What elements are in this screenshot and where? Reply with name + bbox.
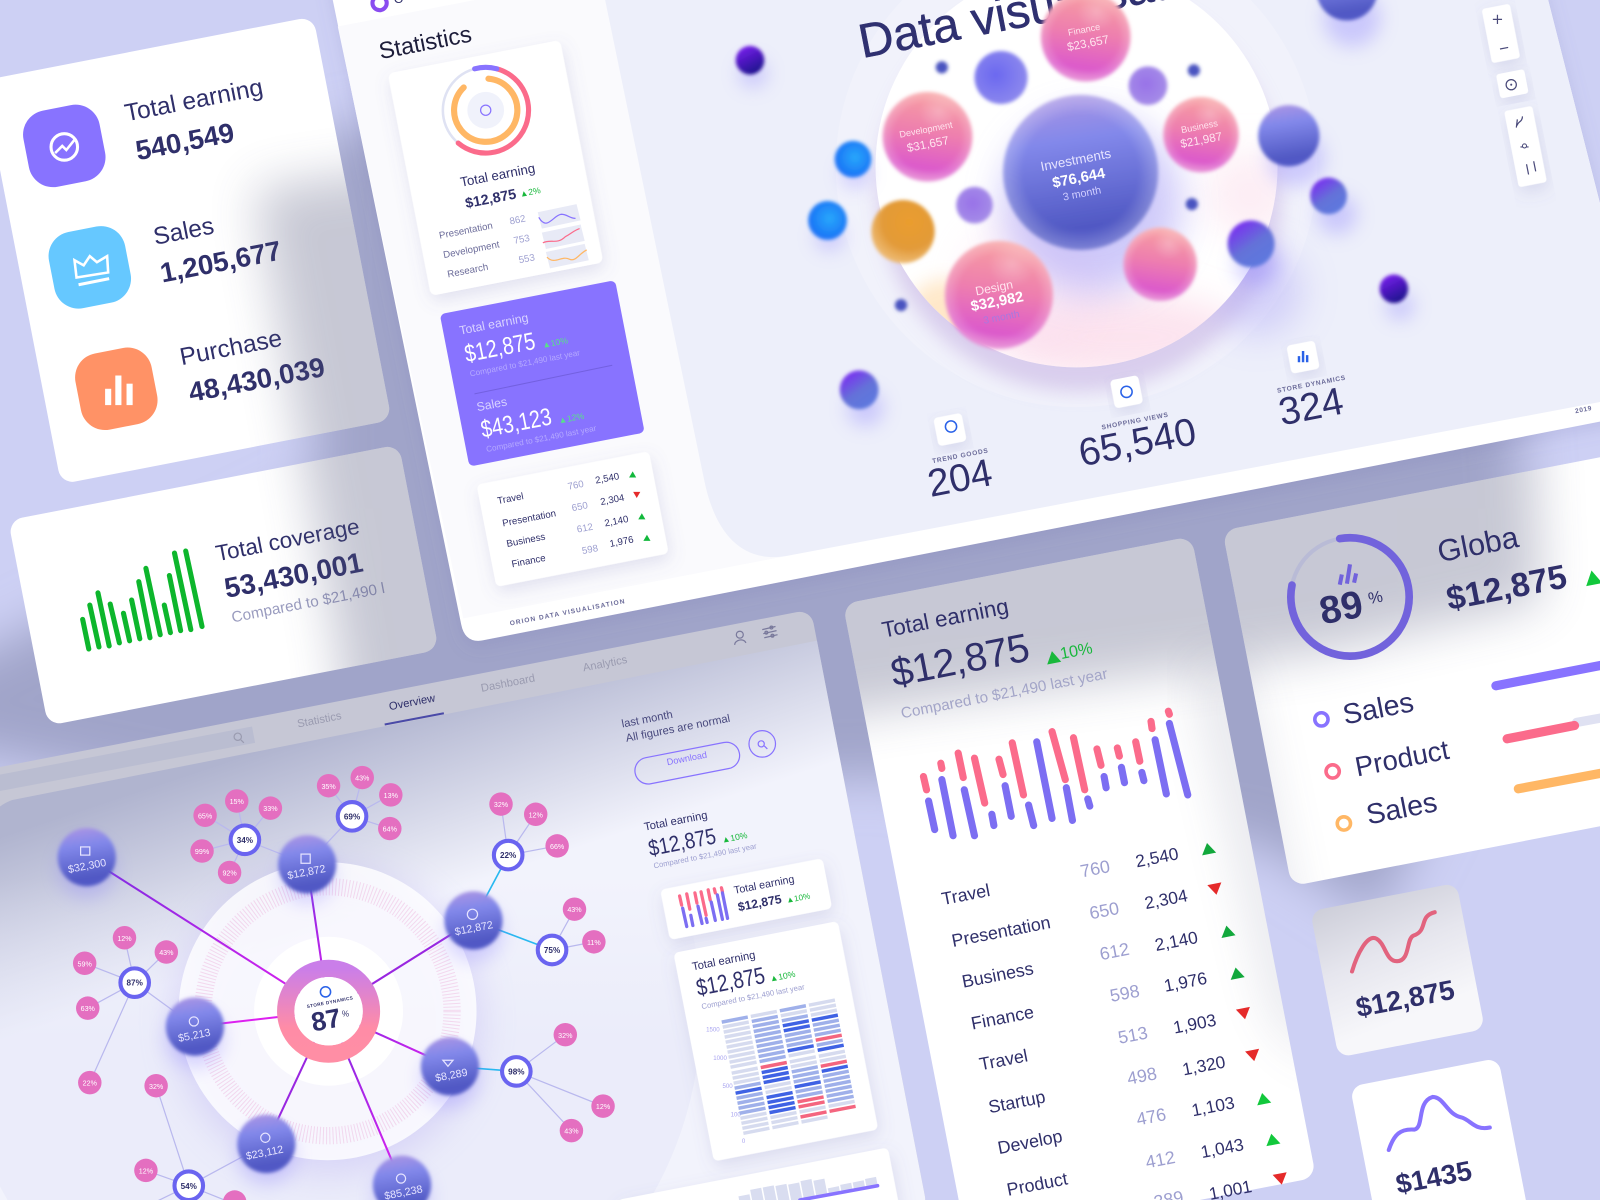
nodes: value spheres: $8,289 [434, 1067, 469, 1085]
card: sparkline total: $1435 [1393, 1155, 1474, 1200]
table: dark values: 2,140 [1153, 927, 1199, 955]
card: heatmap: Compared to $21,490 last year [701, 982, 806, 1011]
text: earning header: 10% [1059, 639, 1094, 663]
leaf nodes: 13% [384, 792, 399, 800]
center card content [880, 594, 1289, 1200]
table: grey values: 612 [1098, 939, 1131, 964]
table: categories: Presentation [950, 912, 1052, 951]
leaf nodes: 32% [558, 1032, 573, 1040]
soft shadow across cards [255, 0, 1541, 1071]
chart: bubble visualisation [736, 0, 1414, 427]
leaf nodes: 12% [596, 1103, 611, 1111]
text: total earning: Total earning [123, 74, 265, 127]
nodes: value spheres [58, 828, 503, 1200]
nodes: value spheres: $12,872 [286, 863, 327, 882]
button: download [633, 740, 742, 786]
card: heatmap: ▲10% [769, 969, 797, 984]
ring nodes: 22% [500, 851, 517, 860]
card: purple earning summary: Total earning [458, 310, 530, 338]
table: dark values: 2,540 [1134, 843, 1180, 871]
bubble: unlabelled pink [1123, 228, 1197, 301]
cast shadow on background [0, 0, 1531, 918]
leaf nodes: 22% [83, 1080, 98, 1088]
icon: settings [762, 626, 778, 638]
radial backdrop [174, 862, 481, 1173]
card: small table: 650 [571, 500, 589, 514]
leaf nodes: 33% [263, 805, 278, 813]
nav tab: overview active: Overview [388, 692, 437, 713]
card: purple earning summary: Sales [475, 395, 508, 414]
table: grey values [1079, 856, 1185, 1200]
card: donut total earning: ▲2% [519, 185, 542, 199]
card: purple earning summary: $12,875 [462, 328, 538, 368]
progress bars [1496, 659, 1600, 789]
table: grey values: 476 [1135, 1104, 1168, 1129]
disc tints [907, 114, 1293, 380]
bubble: business [1163, 97, 1239, 172]
bubble: design [945, 241, 1053, 349]
table: dark values: 1,320 [1181, 1052, 1227, 1079]
card: sparkline value [1310, 883, 1485, 1057]
text: global value: $12,875 [1443, 559, 1570, 618]
table: dark values: 1,043 [1199, 1134, 1245, 1162]
panel: earnings summary [0, 16, 392, 484]
ring nodes: 54% [181, 1182, 198, 1191]
text: coverage title: Total coverage [214, 514, 362, 566]
text: status note: last month [621, 709, 674, 730]
leaf nodes: 11% [587, 939, 601, 947]
heatmap axis: 1000 [713, 1055, 727, 1062]
ring nodes: 69% [344, 812, 361, 821]
table: grey values: 650 [1088, 898, 1121, 923]
leaf nodes: 99% [195, 848, 210, 856]
text: sales value: 1,205,677 [157, 235, 284, 289]
footer: year: 2019 [1575, 405, 1593, 415]
leaf nodes: 43% [567, 906, 582, 914]
leaf nodes: 43% [355, 775, 370, 783]
donut chart [433, 58, 538, 163]
stat: store dynamics [1275, 340, 1347, 434]
stat: trend goods [924, 413, 996, 506]
panel: main data visualisation board [329, 0, 1600, 641]
card: purple earning summary: ▲12% [558, 411, 585, 425]
ring nodes: 87% [127, 979, 144, 988]
text: earning summary: Total earning [643, 810, 709, 834]
card: purple earning summary: ▲10% [541, 335, 569, 350]
text: earning summary [643, 810, 758, 870]
mini table values [509, 214, 536, 266]
nav tab: analytics: Analytics [582, 654, 629, 674]
network links [87, 855, 552, 1185]
icon: crown badge [44, 222, 135, 313]
button: download: Download [666, 750, 708, 767]
card: donut total earning: Total earning [459, 160, 536, 190]
bubble: business: Business [1180, 118, 1219, 135]
stat: shopping views [1075, 375, 1200, 475]
nodes: value spheres: $23,112 [245, 1144, 285, 1163]
text: coverage value: 53,430,001 [222, 547, 365, 604]
text: sales: Sales [151, 213, 216, 251]
card: mini bars: ▲10% [785, 892, 811, 905]
nav tab: statistics: Statistics [296, 710, 343, 730]
button: round icon [749, 731, 776, 757]
leaf nodes: 64% [383, 826, 398, 834]
table: dark values: 1,976 [1162, 968, 1209, 996]
center gauge: store dynamics: STORE DYNAMICS [306, 995, 354, 1009]
stat: shopping views: 65,540 [1075, 410, 1200, 475]
bubble: development: $31,657 [906, 134, 950, 155]
card: heatmap: Total earning [691, 949, 756, 973]
card: heatmap [673, 921, 878, 1161]
center gauge: store dynamics: 87 [309, 1002, 343, 1038]
nav tab: overview active [385, 692, 444, 724]
text: earning header [880, 594, 1109, 722]
table: categories: Travel [940, 880, 992, 909]
card: small table: Presentation [502, 508, 557, 529]
heatmap axis: 100 [731, 1111, 741, 1118]
card: small table: 760 [567, 479, 585, 493]
panel: overview dashboard [0, 609, 1020, 1200]
outer purple glow [1212, 246, 1302, 336]
stat: trend goods: 204 [924, 451, 996, 506]
card: small table [477, 451, 669, 587]
icon: user [735, 631, 746, 645]
bubble: business: $21,987 [1179, 130, 1223, 151]
text: global heading: Globa [1435, 520, 1522, 569]
text: purchase: Purchase [178, 325, 284, 371]
sidebar background [338, 0, 786, 618]
card: small table: 2,304 [599, 493, 626, 508]
global card content [1281, 520, 1600, 831]
nodes: value spheres: $12,872 [454, 919, 494, 938]
node glyphs [81, 847, 478, 1183]
table: categories: Startup [987, 1087, 1047, 1117]
stat: store dynamics: STORE DYNAMICS [1277, 375, 1347, 395]
card: small table: 612 [576, 522, 594, 536]
leaf nodes: 32% [149, 1083, 164, 1091]
card: mini bars [660, 858, 832, 940]
legend: sales second: Sales [1364, 786, 1440, 831]
leaf nodes: 63% [81, 1005, 96, 1013]
bubble: design: 3 month [982, 309, 1021, 327]
bubble glows [739, 0, 1414, 427]
leaf nodes: 15% [230, 798, 245, 806]
bar chart: coverage [83, 551, 202, 649]
card: small table: 1,976 [609, 534, 635, 550]
heatmap axis: 0 [742, 1138, 746, 1145]
card: donut total earning: $12,875 [464, 187, 518, 212]
chart: network diagram [58, 766, 615, 1200]
text: earning summary: ▲10% [721, 830, 749, 845]
card: sparkline value: $12,875 [1353, 974, 1457, 1023]
mini table values: 553 [518, 252, 536, 266]
bubble: investments: $76,644 [1051, 166, 1107, 192]
text: earning summary: Compared to $21,490 last year [653, 841, 758, 870]
sparklines [538, 204, 589, 268]
ring nodes: 75% [544, 946, 561, 955]
table: categories: Product [1005, 1168, 1069, 1200]
central disc [876, 0, 1278, 367]
heatmap axis: 1500 [706, 1027, 720, 1034]
leaf nodes: 12% [139, 1167, 154, 1175]
card: bottom area chart [617, 1147, 899, 1200]
leaf nodes: 92% [222, 870, 237, 878]
disc shadow [871, 92, 1288, 398]
leaf nodes: 12% [117, 935, 132, 943]
table: trend arrows [1200, 842, 1289, 1186]
bubble: development: Development [898, 120, 954, 140]
table: grey values: 498 [1126, 1063, 1159, 1089]
legend: sales: Sales [1340, 686, 1416, 731]
card: small table: 2,140 [604, 514, 630, 529]
card: sparkline total [1350, 1058, 1529, 1200]
panel: total coverage [8, 444, 439, 726]
leaf nodes: 43% [159, 949, 174, 957]
text: total earning value: 540,549 [133, 117, 237, 166]
leaf nodes: 43% [564, 1128, 579, 1136]
card: purple earning summary: Compared to $21,490 last year [469, 348, 581, 378]
icon: bars badge [71, 343, 162, 434]
card: small table: Business [506, 532, 546, 550]
gauge: 89 percent [1281, 528, 1419, 666]
card: mini bars: Total earning [733, 873, 795, 897]
table: dark values [1134, 843, 1254, 1200]
text: status note: All figures are normal [625, 713, 731, 745]
bubble: investments: 3 month [1062, 184, 1102, 204]
ring nodes: 98% [508, 1067, 525, 1076]
card: small table: Finance [511, 553, 547, 570]
card: purple earning summary: Compared to $21,490 last year [485, 424, 597, 454]
stat: trend goods: TREND GOODS [932, 447, 989, 465]
leaf nodes [73, 766, 615, 1200]
text: earning header: Compared to $21,490 last year [900, 666, 1109, 722]
leaf nodes: 59% [78, 960, 92, 968]
legend: product: Product [1352, 734, 1452, 782]
table: grey values: 412 [1144, 1147, 1177, 1172]
content area [604, 0, 1600, 557]
table: grey values: 598 [1108, 981, 1141, 1006]
mini table: Development [442, 239, 501, 261]
table: categories: Business [960, 958, 1035, 992]
mini table values: 753 [513, 233, 531, 247]
leaf nodes: 12% [529, 811, 544, 819]
bubble: investments [1003, 95, 1158, 250]
leaf nodes: 32% [494, 801, 509, 809]
text: purchase value: 48,430,039 [186, 351, 327, 408]
table: categories [940, 880, 1069, 1200]
text: earning summary: $12,875 [646, 823, 718, 861]
leaf nodes: 65% [198, 812, 213, 820]
text: earning header: Total earning [880, 594, 1011, 643]
card: purple earning summary [440, 280, 645, 467]
mini table [438, 221, 501, 280]
leaf links [85, 778, 603, 1200]
gauge: 89 percent: 89 [1316, 583, 1366, 633]
card: mini bars: $12,875 [737, 892, 783, 914]
icon: search [234, 733, 244, 743]
text: earning header: $12,875 [887, 626, 1033, 696]
table: categories: Develop [996, 1126, 1064, 1158]
nodes: value spheres: $5,213 [177, 1027, 212, 1045]
card: small table: 598 [581, 543, 599, 557]
center gauge: store dynamics [286, 968, 371, 1054]
nav tab: dashboard: Dashboard [480, 673, 536, 695]
stat: store dynamics: 324 [1275, 380, 1347, 434]
table: categories: Finance [969, 1002, 1036, 1034]
bubble: design: $32,982 [969, 289, 1025, 315]
table: dark values: 2,304 [1143, 885, 1190, 913]
gauge: 89 percent: % [1367, 588, 1384, 608]
card: donut total earning [388, 40, 603, 296]
bubble: finance: $23,657 [1066, 33, 1110, 54]
center gauge: store dynamics: % [342, 1009, 349, 1018]
leaf nodes: 66% [550, 843, 565, 851]
mini table values: 862 [509, 214, 527, 227]
mini table: Presentation [438, 221, 494, 242]
heatmap axis: 500 [722, 1083, 733, 1090]
card: heatmap: $12,875 [694, 962, 767, 1001]
bubble: design: Design [974, 277, 1014, 298]
card: small table: 2,540 [594, 471, 621, 487]
text: coverage comparison: Compared to $21,490 l [230, 580, 386, 626]
heatmap axis [706, 1027, 746, 1145]
bubble: finance: Finance [1067, 22, 1101, 38]
toolbar: map controls [1482, 4, 1547, 187]
bubble: development [883, 92, 972, 182]
stat: shopping views: SHOPPING VIEWS [1101, 412, 1169, 432]
bar chart: paired bars [923, 711, 1188, 836]
bubble: investments: Investments [1039, 146, 1113, 174]
ring nodes [120, 802, 566, 1200]
card: small table: Travel [496, 491, 525, 507]
bubble: finance [1041, 0, 1131, 82]
heading: statistics: Statistics [377, 21, 474, 64]
leaf nodes: 35% [321, 783, 336, 791]
icon: green up arrow [1583, 569, 1600, 586]
table: categories: Travel [978, 1045, 1029, 1074]
bubbles: unlabelled [736, 0, 1408, 409]
heatmap grid [721, 998, 857, 1135]
panel: global gauge card [1222, 443, 1600, 886]
table: dark values: 1,903 [1171, 1010, 1218, 1038]
outer halo [836, 0, 1317, 407]
mini table: Research [446, 262, 489, 280]
table: dark values: 1,103 [1190, 1092, 1236, 1120]
ring nodes: 34% [237, 836, 254, 845]
icon: trend badge [19, 100, 110, 191]
table: grey values: 760 [1079, 856, 1112, 881]
panel: total earning table [843, 536, 1316, 1200]
footer: brand label: ORION DATA VISUALISATION [509, 598, 626, 627]
logo [372, 0, 403, 10]
table: grey values: 513 [1116, 1022, 1149, 1048]
nodes: value spheres: $32,300 [67, 857, 107, 876]
card: purple earning summary: $43,123 [479, 404, 554, 444]
